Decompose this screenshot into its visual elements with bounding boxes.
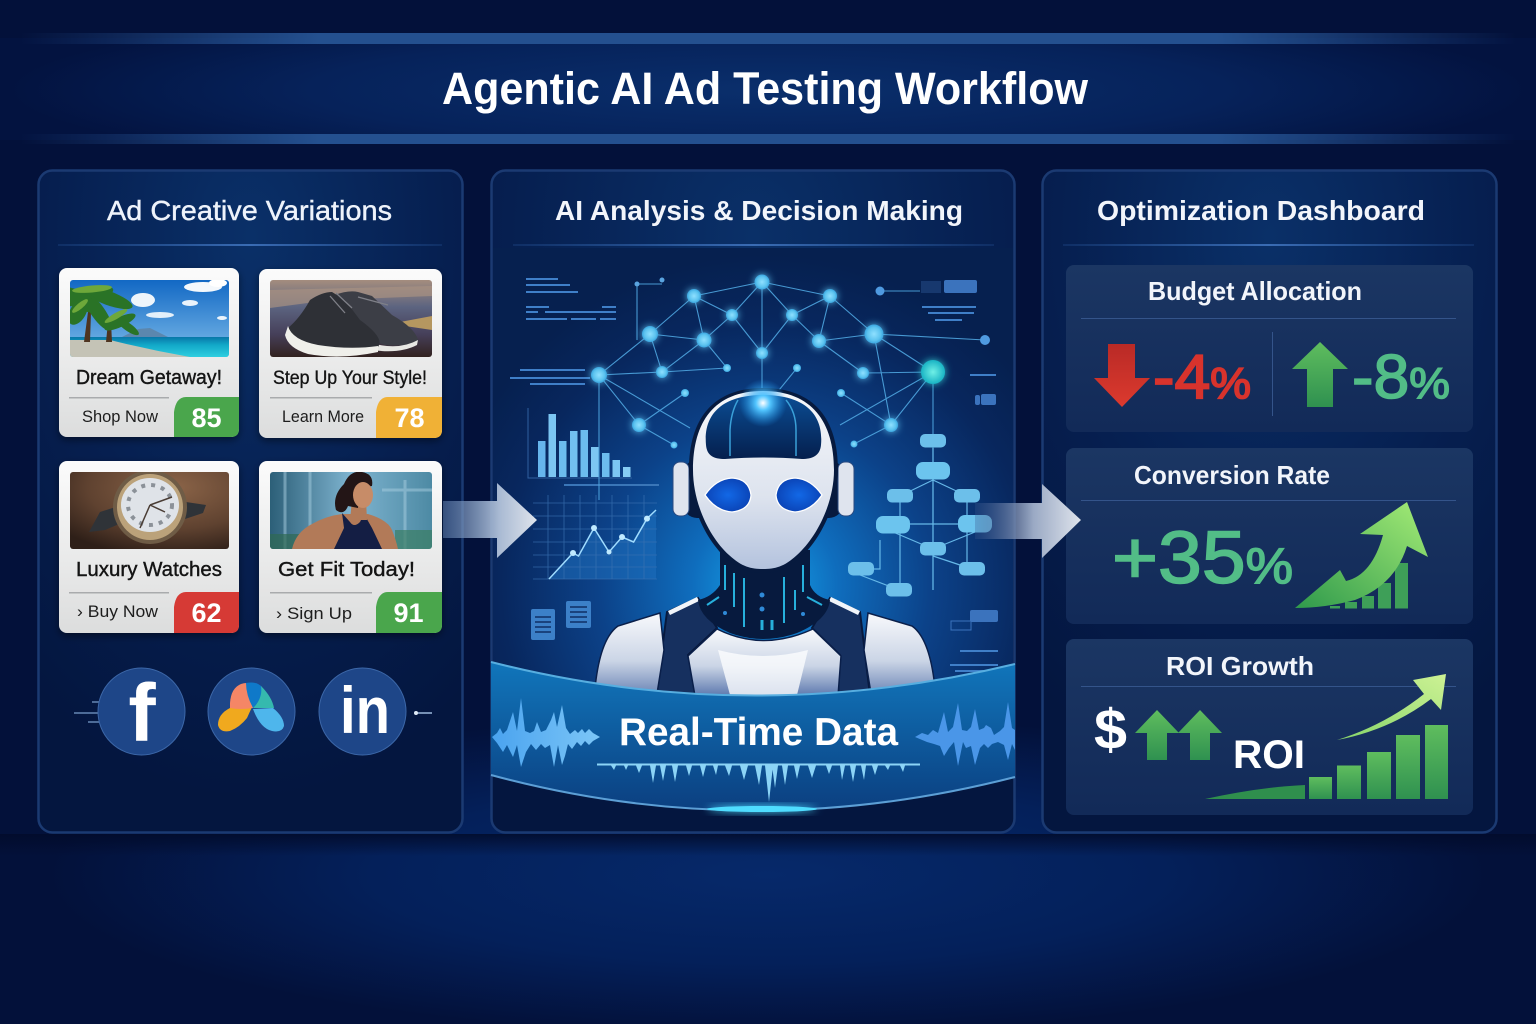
banner text: Real-Time Data (619, 711, 898, 754)
card: roi growth (1066, 639, 1473, 815)
robot eyes (705, 478, 822, 512)
chart: growth bars (1205, 725, 1448, 799)
card heading: Dream Getaway! (76, 367, 222, 389)
robot visor (706, 379, 821, 459)
ad card: step up your style (259, 269, 442, 438)
chart: bars (528, 408, 659, 486)
heading: ad creative variations: Ad Creative Variations (107, 195, 392, 226)
call to action: › Buy Now (77, 603, 158, 621)
icon: green up arrow (1292, 342, 1348, 407)
heading: ai analysis: AI Analysis & Decision Making (555, 195, 963, 226)
icon: red down arrow (1094, 344, 1150, 407)
arrow: analysis to dashboard (975, 484, 1081, 558)
icon: colourful platform logo (208, 668, 295, 755)
panel: ad creative variations (38, 170, 462, 832)
chart: line graph (533, 495, 657, 579)
call to action: Learn More (282, 408, 364, 426)
call to action: › Sign Up (276, 604, 352, 623)
call to action: Shop Now (82, 408, 158, 426)
banner: real-time data (491, 662, 1015, 812)
image: woman (270, 472, 432, 549)
waveform: left (492, 698, 600, 767)
title: Agentic AI Ad Testing Workflow (442, 63, 1089, 114)
card heading: Luxury Watches (76, 559, 222, 581)
panel: ai analysis and decision making (491, 170, 1015, 832)
flowchart (848, 434, 992, 596)
score badge: 78: 78 (394, 403, 425, 433)
image: beach (57, 279, 229, 357)
icon: rising green arrow (1295, 502, 1428, 608)
card heading: Step Up Your Style! (273, 368, 427, 389)
ad card: dream getaway (57, 268, 239, 437)
waveform: right (915, 702, 1015, 766)
value: +35%: +35% (1112, 516, 1293, 599)
card: budget allocation: Budget Allocation (1148, 276, 1362, 306)
icon: double up arrows (1135, 710, 1222, 760)
card: roi growth: ROI Growth (1166, 651, 1314, 681)
data text lines (510, 279, 998, 671)
score badge: 78 (376, 397, 442, 438)
robot ears (673, 460, 854, 518)
score badge: 91: 91 (393, 598, 424, 628)
card: conversion rate (1066, 448, 1473, 624)
robot body (594, 550, 936, 700)
heading: optimization dashboard: Optimization Dashboard (1097, 195, 1425, 226)
title band (0, 33, 1536, 144)
icon: rising lime arrow (1337, 674, 1446, 740)
icon: linkedin (319, 668, 432, 755)
image: watch (70, 470, 229, 549)
score badge: 62 (174, 592, 239, 633)
card heading: Get Fit Today! (278, 558, 415, 581)
robot (594, 379, 936, 700)
card: budget allocation (1066, 265, 1473, 432)
value: -8%: -8% (1352, 343, 1450, 412)
chart: small bars (1330, 563, 1408, 608)
neural network (591, 274, 998, 630)
panel: optimization dashboard (1042, 170, 1496, 832)
score badge: 91 (376, 592, 442, 633)
card: conversion rate: Conversion Rate (1134, 460, 1330, 490)
icons: documents (531, 601, 591, 640)
waveform: bottom (597, 764, 920, 802)
icon: facebook (74, 668, 185, 759)
icon: dollar sign: $ (1094, 698, 1127, 762)
score badge: 85: 85 (191, 403, 222, 433)
value: -4%: -4% (1153, 343, 1251, 412)
image: shoes (270, 280, 432, 357)
robot head (689, 388, 838, 552)
icon: facebook: f (128, 668, 156, 759)
arrow: creatives to analysis (443, 483, 537, 558)
label: roi: ROI (1233, 733, 1305, 777)
ad card: luxury watches (59, 461, 239, 633)
ad card: get fit today (259, 461, 442, 633)
score badge: 62: 62 (191, 598, 222, 628)
score badge: 85 (174, 397, 239, 437)
icon: linkedin: in (340, 673, 390, 747)
robot face (693, 391, 834, 569)
